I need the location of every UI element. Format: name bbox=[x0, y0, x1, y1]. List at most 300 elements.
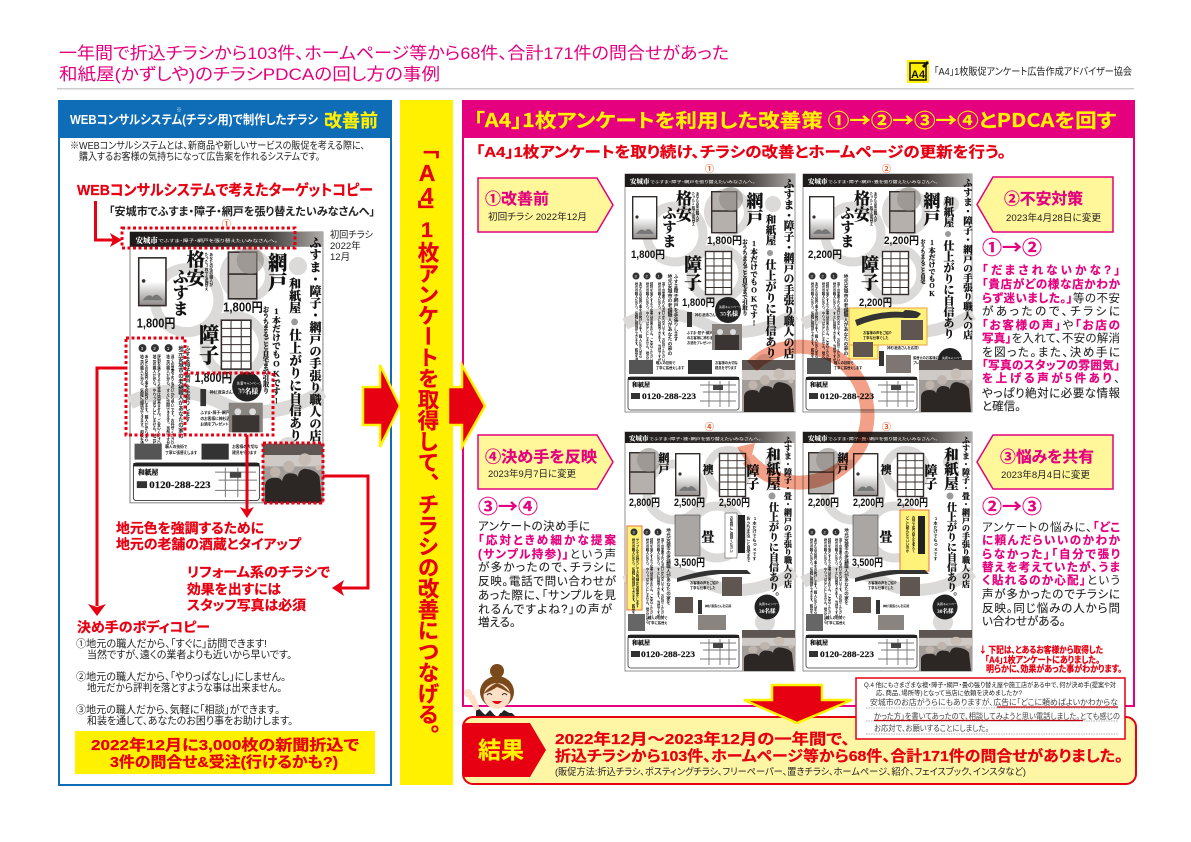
flyer: main initial flyer: 3 bbox=[141, 346, 144, 351]
flyer: step 1: 安城市 bbox=[630, 176, 650, 186]
step 4 explanation: アンケートの決め手に bbox=[478, 519, 590, 533]
body copy list bbox=[76, 637, 293, 727]
survey note: 明らかに、効果があった事がわかります。 bbox=[986, 663, 1122, 674]
survey excerpt: Q.4 他にもさまざまな襖・障子・網戸・畳の張り替え屋や施工店がある中で、何が決め手(提案や対 bbox=[864, 680, 1116, 689]
system note bbox=[70, 139, 365, 163]
panel: result bbox=[463, 717, 1136, 784]
yellow highlight: customer voice: 丁寧な仕事でした bbox=[863, 335, 889, 340]
flyer: step 4: 3 bbox=[632, 530, 636, 534]
callout: staff photo highlight and arrow bbox=[263, 443, 368, 596]
flyer: step 4: 先着キャンペーン bbox=[759, 601, 782, 606]
panel subheading: 「A4」1枚アンケートを取り続け、チラシの改善とホームページの更新を行う。 bbox=[476, 143, 1006, 161]
flyer: step 3: 障子 bbox=[922, 463, 938, 490]
flyer: step 2: プレゼント bbox=[913, 360, 928, 365]
flyer: step 4: 評判を落とすような事は出来ません。ご安心ください bbox=[649, 537, 653, 617]
callout: target copy highlight and arrow bbox=[96, 201, 295, 248]
body copy list: ②地元の職人だから、「やりっぱなし」にしません。 bbox=[76, 670, 286, 683]
flyer: step 3: 2,200円 bbox=[897, 496, 928, 509]
step 3 explanation: 声が多かったのでチラシに bbox=[982, 587, 1120, 601]
flyer: step 2: たった1枚でも張替え bbox=[869, 191, 873, 226]
flyer: step 4: 安城市 bbox=[629, 434, 649, 442]
step 4 explanation: れるんですよね?」の声が bbox=[478, 602, 613, 616]
flyer: step 4: おうちまるごと自宅まで bbox=[746, 515, 752, 563]
arrow: band to right panel bbox=[448, 365, 485, 447]
flyer note: 初回チラシ bbox=[330, 229, 373, 241]
flyer: step 1: あなたの街の職人が bbox=[695, 191, 699, 222]
step 4 explanation: 増える。 bbox=[478, 616, 516, 629]
flyer: step 2: ふすま bbox=[838, 206, 854, 248]
flyer: step 1 bbox=[625, 174, 795, 412]
system note: 購入するお客様の気持ちになって広告案を作れるシステムです。 bbox=[79, 150, 320, 163]
flyer note: 12月 bbox=[330, 252, 350, 263]
callout text: staff photo: リフォーム系のチラシで bbox=[187, 565, 330, 580]
flyer numbers bbox=[705, 164, 891, 432]
flyer: main initial flyer: お酒をプレゼント bbox=[200, 421, 229, 426]
step 2 explanation: 写真」を入れて、不安の解消 bbox=[982, 331, 1120, 345]
flyer: main initial flyer: 1 bbox=[167, 346, 170, 351]
step 2 explanation bbox=[982, 233, 1121, 413]
flyer: main initial flyer: 1,800円 bbox=[137, 317, 175, 331]
central band: 4 bbox=[414, 183, 440, 209]
flyer: step 1: 2 bbox=[646, 274, 648, 278]
flyer: step 3: 先着キャンペーン bbox=[937, 601, 960, 606]
flyer: step 4: 神杉酒造さんを応援 bbox=[705, 603, 731, 608]
flyer: step 1: あなたのお困り事をお助けします。職人だから安心 bbox=[638, 281, 642, 358]
step 3 tag: 2023年8月4日に変更 bbox=[1001, 469, 1090, 481]
step 4 tag bbox=[478, 435, 613, 489]
flyer: step 1: 和紙屋 bbox=[632, 381, 651, 389]
step 1 tag: 初回チラシ 2022年12月 bbox=[488, 211, 587, 223]
title: 一年間で折込チラシから103件、ホームページ等から68件、合計171件の問合せがあった bbox=[59, 44, 729, 63]
flyer: step 1: 神杉酒造さんを応援! bbox=[695, 312, 727, 317]
flyer: step 1: ふすま・障子・網戸を張替え bbox=[687, 330, 726, 335]
flyer: step 4: 和紙屋 bbox=[632, 639, 651, 647]
title bbox=[59, 44, 729, 84]
step 3 explanation bbox=[982, 492, 1121, 628]
flyer: main initial flyer: あなたのお困り事をお助けします。職人だから安心 bbox=[144, 354, 149, 441]
flyer: main initial flyer: 遠くの業者よりも近いから早いです。お任せください bbox=[170, 354, 175, 445]
callout: body copy highlight and arrow bbox=[88, 338, 185, 616]
before result callout: 2022年12月に3,000枚の新聞折込で bbox=[91, 736, 360, 754]
flyer: main initial flyer: 地元の職人だから、すぐに訪問できます。当然ですが bbox=[165, 354, 171, 446]
step 3 explanation: 替えを考えていたが、うま bbox=[982, 560, 1120, 574]
step 4 explanation: 「応対ときめ細かな提案 bbox=[478, 533, 616, 547]
survey note bbox=[979, 643, 1122, 674]
before result callout bbox=[75, 731, 375, 774]
icon: association logo bbox=[907, 60, 929, 83]
callout text: staff photo bbox=[187, 565, 330, 613]
flyer: step 2: 遠くの業者よりも近いから早いです。お任せください bbox=[836, 281, 840, 361]
flyer numbers: ④ bbox=[705, 422, 714, 432]
flyer: step 4: お気軽にご相談ください bbox=[729, 515, 733, 552]
flyer: main initial flyer: 地元安城市の老舗職人があなたの家の bbox=[177, 345, 184, 439]
flyer: main initial flyer: 仕上がりに自信あり bbox=[288, 328, 302, 441]
flyer: step 3: 地元の職人だから、やりっぱなしにしません。地元だから bbox=[823, 537, 827, 624]
icon: association logo: A4 bbox=[911, 69, 926, 81]
step 4 tag: 2023年9月7日に変更 bbox=[488, 468, 576, 480]
step 3 explanation: い合わせがある。 bbox=[982, 614, 1066, 628]
flyer: step 1: 仕上がりに自信あり bbox=[764, 258, 776, 359]
flyer: step 2: あなたのお困り事をお助けします。職人だから安心 bbox=[814, 281, 818, 358]
flyer: step 3: 評判を落とすような事は出来ません。ご安心ください bbox=[827, 537, 831, 617]
flyer: main initial flyer: 2 bbox=[153, 346, 156, 351]
flyer: step 1: お客様の大切な bbox=[715, 360, 739, 365]
flyer: main initial flyer: 地元の職人だから、やりっぱなしにしません。地元だから bbox=[152, 354, 157, 453]
flyer: step 4: 地元の職人だから、すぐに訪問できます。当然ですが bbox=[656, 537, 660, 618]
flyer: step 4: お客様の声をご紹介 bbox=[690, 580, 720, 585]
flyer: step 1: ふすま・障子・網戸の手張り職人の店 bbox=[782, 178, 794, 359]
body copy list: ③地元の職人だから、気軽に「相談」ができます。 bbox=[76, 703, 280, 716]
step 2 tag: 2023年4月28日に変更 bbox=[1006, 212, 1101, 224]
flyer: step 4: 網戸 bbox=[657, 451, 670, 475]
flyer: step 2: 3 bbox=[810, 274, 814, 278]
flyer: step 2: 和紙屋 bbox=[810, 381, 829, 389]
step 4 explanation: 反映。電話で問い合わせが bbox=[478, 574, 617, 588]
panel header: ※ bbox=[176, 107, 182, 114]
flyer: step 3: 地元安城市の老舗職人があなたの家を bbox=[844, 527, 850, 605]
flyer note bbox=[330, 229, 373, 263]
flyer: step 2: おうちまるごと自宅 bbox=[920, 239, 925, 284]
arrow: down to result bbox=[744, 685, 852, 723]
flyer: step 1: 格安 bbox=[674, 189, 692, 223]
flyer: step 4: 仕上がりに自信あり。 bbox=[766, 501, 778, 602]
flyer: main initial flyer: 評判を落とすような事は出来ません。ご安心ください bbox=[156, 354, 162, 445]
result tag: 結果 bbox=[478, 737, 524, 763]
callout text: staff photo: 効果を出すには bbox=[187, 582, 282, 597]
step 3 tag: ③悩みを共有 bbox=[1000, 448, 1094, 466]
flyer: step 1: お酒をプレゼント bbox=[687, 340, 712, 345]
flyer: step 1: 先着キャンペーン bbox=[719, 304, 742, 309]
flyer: main initial flyer: ふすま・障子・網戸を張替え bbox=[200, 410, 244, 415]
flyer: step 1: 0120-288-223 bbox=[642, 391, 696, 401]
step 3 explanation: ②→③ bbox=[982, 492, 1042, 519]
flyer: step 2: 神杉酒造さんを応援! bbox=[887, 345, 919, 350]
flyer: main initial flyer: ふすま障子網戸を手張りします bbox=[184, 346, 190, 424]
step 3 explanation: く貼れるのか心配」という bbox=[982, 573, 1120, 587]
survey excerpt: お応対で、お願いすることにしました。 bbox=[874, 723, 989, 733]
flyer: step 3: でふすま・障子・畳・網戸を張り替えたいみなさんへ。 bbox=[828, 436, 939, 441]
arrow: left panel to band bbox=[363, 365, 400, 447]
step 2 explanation: 「写真のスタッフの雰囲気」 bbox=[982, 358, 1120, 372]
flyer: step 2: 評判を落とすような事は出来ません。ご安心ください bbox=[825, 281, 829, 361]
flyer: step 2: 格安 bbox=[852, 189, 870, 223]
step 2 explanation: 「だまされないかな?」 bbox=[982, 264, 1120, 277]
flyer: step 4: 地元の職人だから、やりっぱなしにしません。地元だから bbox=[645, 537, 649, 624]
flyer: step 4: 2,800円 bbox=[629, 496, 660, 509]
step 3 tag bbox=[977, 435, 1113, 489]
system note: ※WEBコンサルシステムとは、新商品や新しいサービスの販促を考える際に、 bbox=[70, 139, 365, 152]
step 4 explanation: あった際に、「サンプルを見 bbox=[478, 589, 616, 602]
flyer: main initial flyer: あなたの街の職人が bbox=[209, 252, 214, 287]
flyer: step 1: 地元の職人だから、やりっぱなしにしません。地元だから bbox=[645, 281, 649, 368]
flyer: step 1: 網戸 bbox=[744, 191, 763, 227]
result text bbox=[555, 730, 1123, 778]
flyer: step 3: お客様の声をご紹介 bbox=[868, 580, 898, 585]
panel: before improvement bbox=[59, 100, 392, 785]
flyer: step 4: 地元の職人だから、気軽に相談ができます。和装を通して bbox=[631, 537, 635, 624]
body copy heading: 決め手のボディコピー bbox=[77, 619, 210, 635]
callout: target copy highlight and arrow: ① bbox=[222, 219, 231, 229]
flyer: step 2 bbox=[803, 174, 973, 412]
flyer: main initial flyer: 30名様 bbox=[238, 387, 258, 396]
flyer: step 3: 2 bbox=[824, 530, 826, 534]
flyer: step 4: 和紙屋 bbox=[764, 446, 780, 492]
flyer: step 4: ふすま・障子・畳・網戸の手張り職人の店 bbox=[782, 436, 792, 589]
step 4 explanation: (サンプル持参)」という声 bbox=[478, 547, 616, 561]
flyer: step 3: 神杉酒造さんを応援 bbox=[883, 603, 909, 608]
flyer: step 3: 地元の職人だから、気軽に相談ができます。和装を通して bbox=[809, 537, 813, 624]
flyer: step 2: 2 bbox=[822, 274, 824, 278]
flyer: step 2: 障子 bbox=[859, 255, 879, 291]
association name: 「A4」1枚販促アンケート広告作成アドバイザー協会 bbox=[934, 65, 1132, 78]
flyer: step 4: 1 bbox=[656, 530, 660, 534]
flyer: step 2: 2,200円 bbox=[884, 234, 919, 247]
central band: A bbox=[414, 160, 440, 186]
flyer: step 1: ふすま bbox=[660, 206, 676, 248]
step 2 explanation: やっぱり絶対に必要な情報 bbox=[982, 386, 1120, 400]
flyer: step 3: 遠くの業者よりも近いから早いです。お任せください bbox=[838, 537, 842, 617]
flyer: step 4: 地元安城市の老舗職人があなたの家を bbox=[666, 527, 672, 605]
flyer: step 4: 1本だけでもOKです bbox=[752, 516, 758, 562]
step 2 explanation: 「お客様の声」や「お店の bbox=[982, 318, 1120, 332]
flyer: step 3 bbox=[803, 432, 973, 671]
flyer: step 2: 地元の職人だから、すぐに訪問できます。当然ですが bbox=[832, 281, 836, 362]
flyer: step 3: 安城市 bbox=[808, 434, 828, 442]
step 2 explanation: を図った。また、決め手に bbox=[982, 345, 1120, 359]
flyer: step 2: 2,200円 bbox=[859, 296, 892, 309]
flyer: step 2: 1本だけでもOK bbox=[928, 239, 936, 298]
step 3 explanation: アンケートの悩みに、「どこ bbox=[982, 520, 1120, 534]
yellow highlight: customer voice: お客様の声をご紹介 bbox=[863, 330, 893, 335]
central band: 「 bbox=[415, 137, 439, 159]
step 2 explanation: と確信。 bbox=[982, 399, 1021, 413]
flyer: step 2: 0120-288-223 bbox=[820, 391, 874, 401]
body copy list: 地元だから評判を落とすような事は出来ません。 bbox=[87, 681, 282, 694]
flyer: main initial flyer: 和紙屋 bbox=[138, 467, 159, 476]
flyer: step 1: 地元の職人だから、気軽に相談ができます。和装を通して bbox=[634, 281, 638, 368]
yellow highlight: worry copy: どこに頼んだらいいのか bbox=[905, 515, 909, 553]
flyer: step 4: でふすま・障子・襖・網戸を張り替えたいみなさんへ。 bbox=[649, 436, 762, 441]
flyer: step 2: でふすま・障子・網戸・畳を張り替えたいみなさんへ。 bbox=[828, 179, 939, 184]
flyer: step 3: 30名様 bbox=[937, 607, 954, 615]
flyer: step 4: 2,500円 bbox=[719, 496, 750, 509]
survey excerpt: 安城市のお店がうらにもありますが、広告に「どこに頼めばよいかわからな bbox=[870, 697, 1118, 707]
flyer: main initial flyer bbox=[130, 232, 323, 503]
flyer: main initial flyer: おうちまるごと自宅まで引取り bbox=[262, 305, 269, 395]
panel header: 「A4」1枚アンケートを利用した改善策 ①→②→③→④とPDCAを回す bbox=[474, 106, 1116, 133]
flyer: step 1: 地元の職人だから、すぐに訪問できます。当然ですが bbox=[657, 281, 661, 362]
flyer: step 4: 丁寧に張替え bbox=[648, 620, 668, 625]
step 1 tag bbox=[478, 178, 613, 232]
flyer: step 1: 1 bbox=[658, 274, 660, 278]
flyer: step 1: 1,800円 bbox=[631, 248, 665, 261]
flyer: main initial flyer: 1,800円 bbox=[195, 371, 232, 385]
flyer: main initial flyer: 建具を守ります bbox=[232, 450, 257, 455]
title: 和紙屋(かずしや)のチラシPDCAの回し方の事例 bbox=[59, 65, 440, 84]
flyer: step 2: 2,200円 bbox=[808, 248, 842, 261]
panel header: WEBコンサルシステム(チラシ用)で制作したチラシ bbox=[70, 112, 318, 127]
flyer: main initial flyer: 網戸 bbox=[265, 251, 287, 292]
step 4 explanation: ③→④ bbox=[478, 492, 538, 519]
flyer: step 1: 1,800円 bbox=[707, 234, 742, 247]
flyer: main initial flyer: 丁寧に張替えします bbox=[165, 450, 198, 455]
flyer: main initial flyer: 安城市 bbox=[136, 236, 158, 245]
result text: 2022年12月〜2023年12月の一年間で、 bbox=[555, 730, 850, 748]
yellow highlight: customer voice bbox=[849, 308, 927, 359]
flyer: main initial flyer: 先着キャンペーン bbox=[237, 380, 263, 385]
step 3 explanation: に頼んだらいいのかわか bbox=[982, 533, 1121, 547]
flyer: step 1: のお客様に神杉酒造の bbox=[687, 335, 720, 340]
flyer: step 3: 地元の職人だから、すぐに訪問できます。当然ですが bbox=[834, 537, 838, 618]
step 2 explanation: ①→② bbox=[982, 233, 1042, 260]
flyer: step 3: 網戸 bbox=[836, 451, 848, 475]
flyer: step 3: 0120-288-223 bbox=[820, 649, 874, 659]
flyer: step 2: あなたの街の職人が bbox=[873, 191, 877, 222]
flyer: step 1: 30名様 bbox=[720, 310, 738, 318]
flyer: main initial flyer: 0120-288-223 bbox=[149, 480, 211, 491]
flyer: step 3: 畳 bbox=[878, 529, 892, 543]
target copy heading: WEBコンサルシステムで考えたターゲットコピー bbox=[77, 181, 373, 199]
flyer: step 2: 地元の職人だから、やりっぱなしにしません。地元だから bbox=[821, 281, 825, 368]
flyer: step 2: 地元の職人だから、気軽に相談ができます。和装を通して bbox=[810, 281, 814, 368]
flyer: main initial flyer: 地元の職人だから、気軽に相談ができます。和装を通して bbox=[139, 354, 144, 453]
flyer: step 1: 丁寧に張替えします bbox=[656, 365, 685, 370]
flyer: step 3: 職人の技術で bbox=[826, 615, 846, 620]
yellow highlight: worry copy: 自分で張り替えを考えて bbox=[911, 515, 915, 552]
flyer: step 4: 畳 bbox=[700, 529, 714, 543]
flyer: step 4 bbox=[625, 432, 795, 671]
flyer: step 4: 障子 bbox=[744, 463, 760, 490]
flyer: step 3: ふすま・障子・畳・網戸の手張り職人の店 bbox=[960, 436, 970, 589]
yellow highlight: worry copy bbox=[900, 510, 929, 571]
flyer: step 2: 安城市 bbox=[808, 176, 828, 186]
flyer: step 4: 2 bbox=[646, 530, 648, 534]
survey excerpt: かった方」を書いてあったので、相談してみようと思い電話しました。とても感じの bbox=[874, 711, 1120, 721]
flyer: step 1: 職人の技術で bbox=[656, 360, 676, 365]
flyer: step 3: 襖 bbox=[879, 463, 892, 476]
arrow: PDCA cycle ring bbox=[737, 347, 868, 483]
panel header bbox=[59, 100, 392, 138]
step 2 explanation: があったので、チラシに bbox=[982, 304, 1120, 318]
flyer: step 2: 網戸 bbox=[920, 191, 940, 227]
flyer: step 3: 和紙屋 bbox=[942, 446, 958, 492]
central band: 」 bbox=[415, 200, 439, 222]
flyer: step 4: 0120-288-223 bbox=[641, 649, 695, 659]
body copy list: 和装を通して、あなたのお困り事をお助けします。 bbox=[87, 714, 293, 727]
flyer: main initial flyer: 神杉酒造さんを応援! bbox=[209, 390, 246, 395]
step 3 explanation: らなかった」「自分で張り bbox=[982, 547, 1120, 561]
flyer: main initial flyer: 障子 bbox=[195, 324, 219, 365]
flyer: step 2: ふすま・障子・網戸の手張り職人の店 bbox=[961, 178, 973, 340]
panel header: 改善前 bbox=[324, 111, 378, 131]
panel: PDCA improvements bbox=[462, 100, 1134, 706]
step 2 tag bbox=[977, 177, 1113, 232]
flyer: step 2: 丁寧に張替えします bbox=[834, 365, 863, 370]
flyer numbers: ② bbox=[882, 164, 891, 174]
callout text: local color: 地元色を強調するために bbox=[116, 520, 264, 536]
flyer: step 2: 仕上がりに自信あり bbox=[942, 239, 954, 340]
flyer: step 3: あなたのお困り事をお助けします。職人だから安心 bbox=[813, 537, 817, 614]
before result callout: 3件の問合せ&受注(行けるかも?) bbox=[110, 753, 338, 771]
flyer: step 4: 30名様 bbox=[759, 607, 776, 615]
flyer: main initial flyer: ふすま・障子・網戸の手張り職人の店 bbox=[308, 237, 322, 442]
flyer: step 4: 3,500円 bbox=[674, 556, 705, 569]
step 1 tag: ①改善前 bbox=[485, 189, 549, 208]
step 2 explanation: 「貴店がどの様な店かわか bbox=[982, 277, 1121, 291]
flyer: step 1: おうちまるごと自宅まで引取り bbox=[741, 239, 748, 317]
target copy quote: 「安城市でふすま・障子・網戸を張り替えたいみなさんへ」 bbox=[109, 204, 375, 218]
survey note: ↓ 下記は、とあるお客様から取得した bbox=[979, 643, 1103, 656]
flyer: step 1: 評判を落とすような事は出来ません。ご安心ください bbox=[649, 281, 653, 361]
flyer: step 1: 遠くの業者よりも近いから早いです。お任せください bbox=[661, 281, 665, 361]
flyer: main initial flyer: のお客様に神杉酒造の bbox=[200, 416, 238, 421]
flyer: step 2: 地元安城市の老舗職人があなたの家の bbox=[842, 273, 848, 357]
icon: presenter woman bbox=[464, 664, 520, 731]
flyer: step 2: 先着キャンペーン bbox=[942, 355, 965, 360]
flyer: step 1: ふすま障子網戸を手張りします bbox=[672, 274, 678, 343]
step 2 explanation: を上げる声が5件あり、 bbox=[982, 371, 1120, 385]
flyer: step 2: 1 bbox=[832, 274, 836, 278]
flyer numbers: ① bbox=[705, 164, 714, 174]
flyer: step 3: 2,200円 bbox=[853, 496, 884, 509]
flyer: main initial flyer: でふすま・障子・網戸を張り替えたいみなさんへ。 bbox=[158, 238, 278, 243]
flyer: main initial flyer: ふすま bbox=[170, 268, 188, 316]
flyer: step 2: 30名様 bbox=[942, 360, 959, 368]
step 4 explanation bbox=[478, 492, 617, 629]
survey excerpt bbox=[856, 678, 1125, 739]
step 4 explanation: が多かったので、チラシに bbox=[478, 560, 616, 574]
callout text: local color bbox=[116, 520, 302, 552]
flyer: step 3: 3,500円 bbox=[852, 556, 883, 569]
flyer: step 4: 襖 bbox=[701, 463, 714, 476]
flyer: step 1: 和紙屋 bbox=[764, 213, 776, 246]
flyer: step 3: 3 bbox=[810, 530, 814, 534]
step 2 tag: ②不安対策 bbox=[1004, 189, 1083, 208]
flyer: step 1: 1本だけでもOKです! bbox=[749, 239, 758, 328]
flyer: step 2: 張替えのお客様に bbox=[913, 355, 939, 360]
flyer: step 1: 1,800円 bbox=[682, 296, 715, 309]
flyer: step 4: 2,500円 bbox=[674, 496, 705, 509]
result text: (販促方法:折込チラシ、ポスティングチラシ、フリーペーパー、置きチラシ、ホームページ、紹介、フェイスブック、インスタなど) bbox=[555, 766, 1026, 778]
body copy list: ①地元の職人だから、「すぐに」訪問できます! bbox=[76, 637, 267, 650]
panel header bbox=[462, 100, 1134, 138]
flyer: step 1: 3 bbox=[634, 274, 638, 278]
callout text: local color: 地元の老舗の酒蔵とタイアップ bbox=[116, 536, 302, 552]
flyer: step 4: サンプルをお持ちしてきめ細かな提案をします bbox=[635, 537, 639, 608]
flyer: step 1: たった1枚でも張替え bbox=[691, 191, 695, 226]
step 3 explanation: 反映。同じ悩みの人から問 bbox=[982, 601, 1120, 615]
flyer: step 1: 地元安城市の老舗職人があなたの家の bbox=[666, 273, 672, 357]
flyer: step 3: 丁寧に張替え bbox=[826, 620, 846, 625]
flyer: main initial flyer: たった1枚でも張替え bbox=[204, 252, 209, 291]
flyer: step 3: 1 bbox=[834, 530, 838, 534]
flyer: main initial flyer: 1本だけでもOKです! bbox=[271, 306, 281, 406]
result tag bbox=[463, 723, 546, 777]
body copy list: 当然ですが、遠くの業者よりも近いから早いです。 bbox=[87, 648, 292, 661]
central band bbox=[400, 100, 453, 785]
flyer: step 1: でふすま・障子・網戸を張り替えたいみなさんへ。 bbox=[650, 179, 756, 184]
flyer: step 2: 職人の技術で bbox=[834, 360, 854, 365]
flyer: main initial flyer: 職人の技術で bbox=[165, 444, 188, 449]
flyer: step 1: 建具を守ります bbox=[715, 365, 737, 370]
flyer: step 4: 職人の技術で bbox=[648, 615, 668, 620]
flyer numbers: ③ bbox=[882, 422, 891, 432]
flyer: step 2: 和紙屋 bbox=[942, 195, 954, 228]
flyer: step 3: 和紙屋 bbox=[810, 639, 829, 647]
flyer: main initial flyer: お客様の大切な bbox=[232, 444, 258, 449]
survey note: 「A4」1枚アンケートにありました。 bbox=[985, 654, 1100, 665]
step 2 explanation: らず迷いました。」等の不安 bbox=[982, 291, 1120, 305]
